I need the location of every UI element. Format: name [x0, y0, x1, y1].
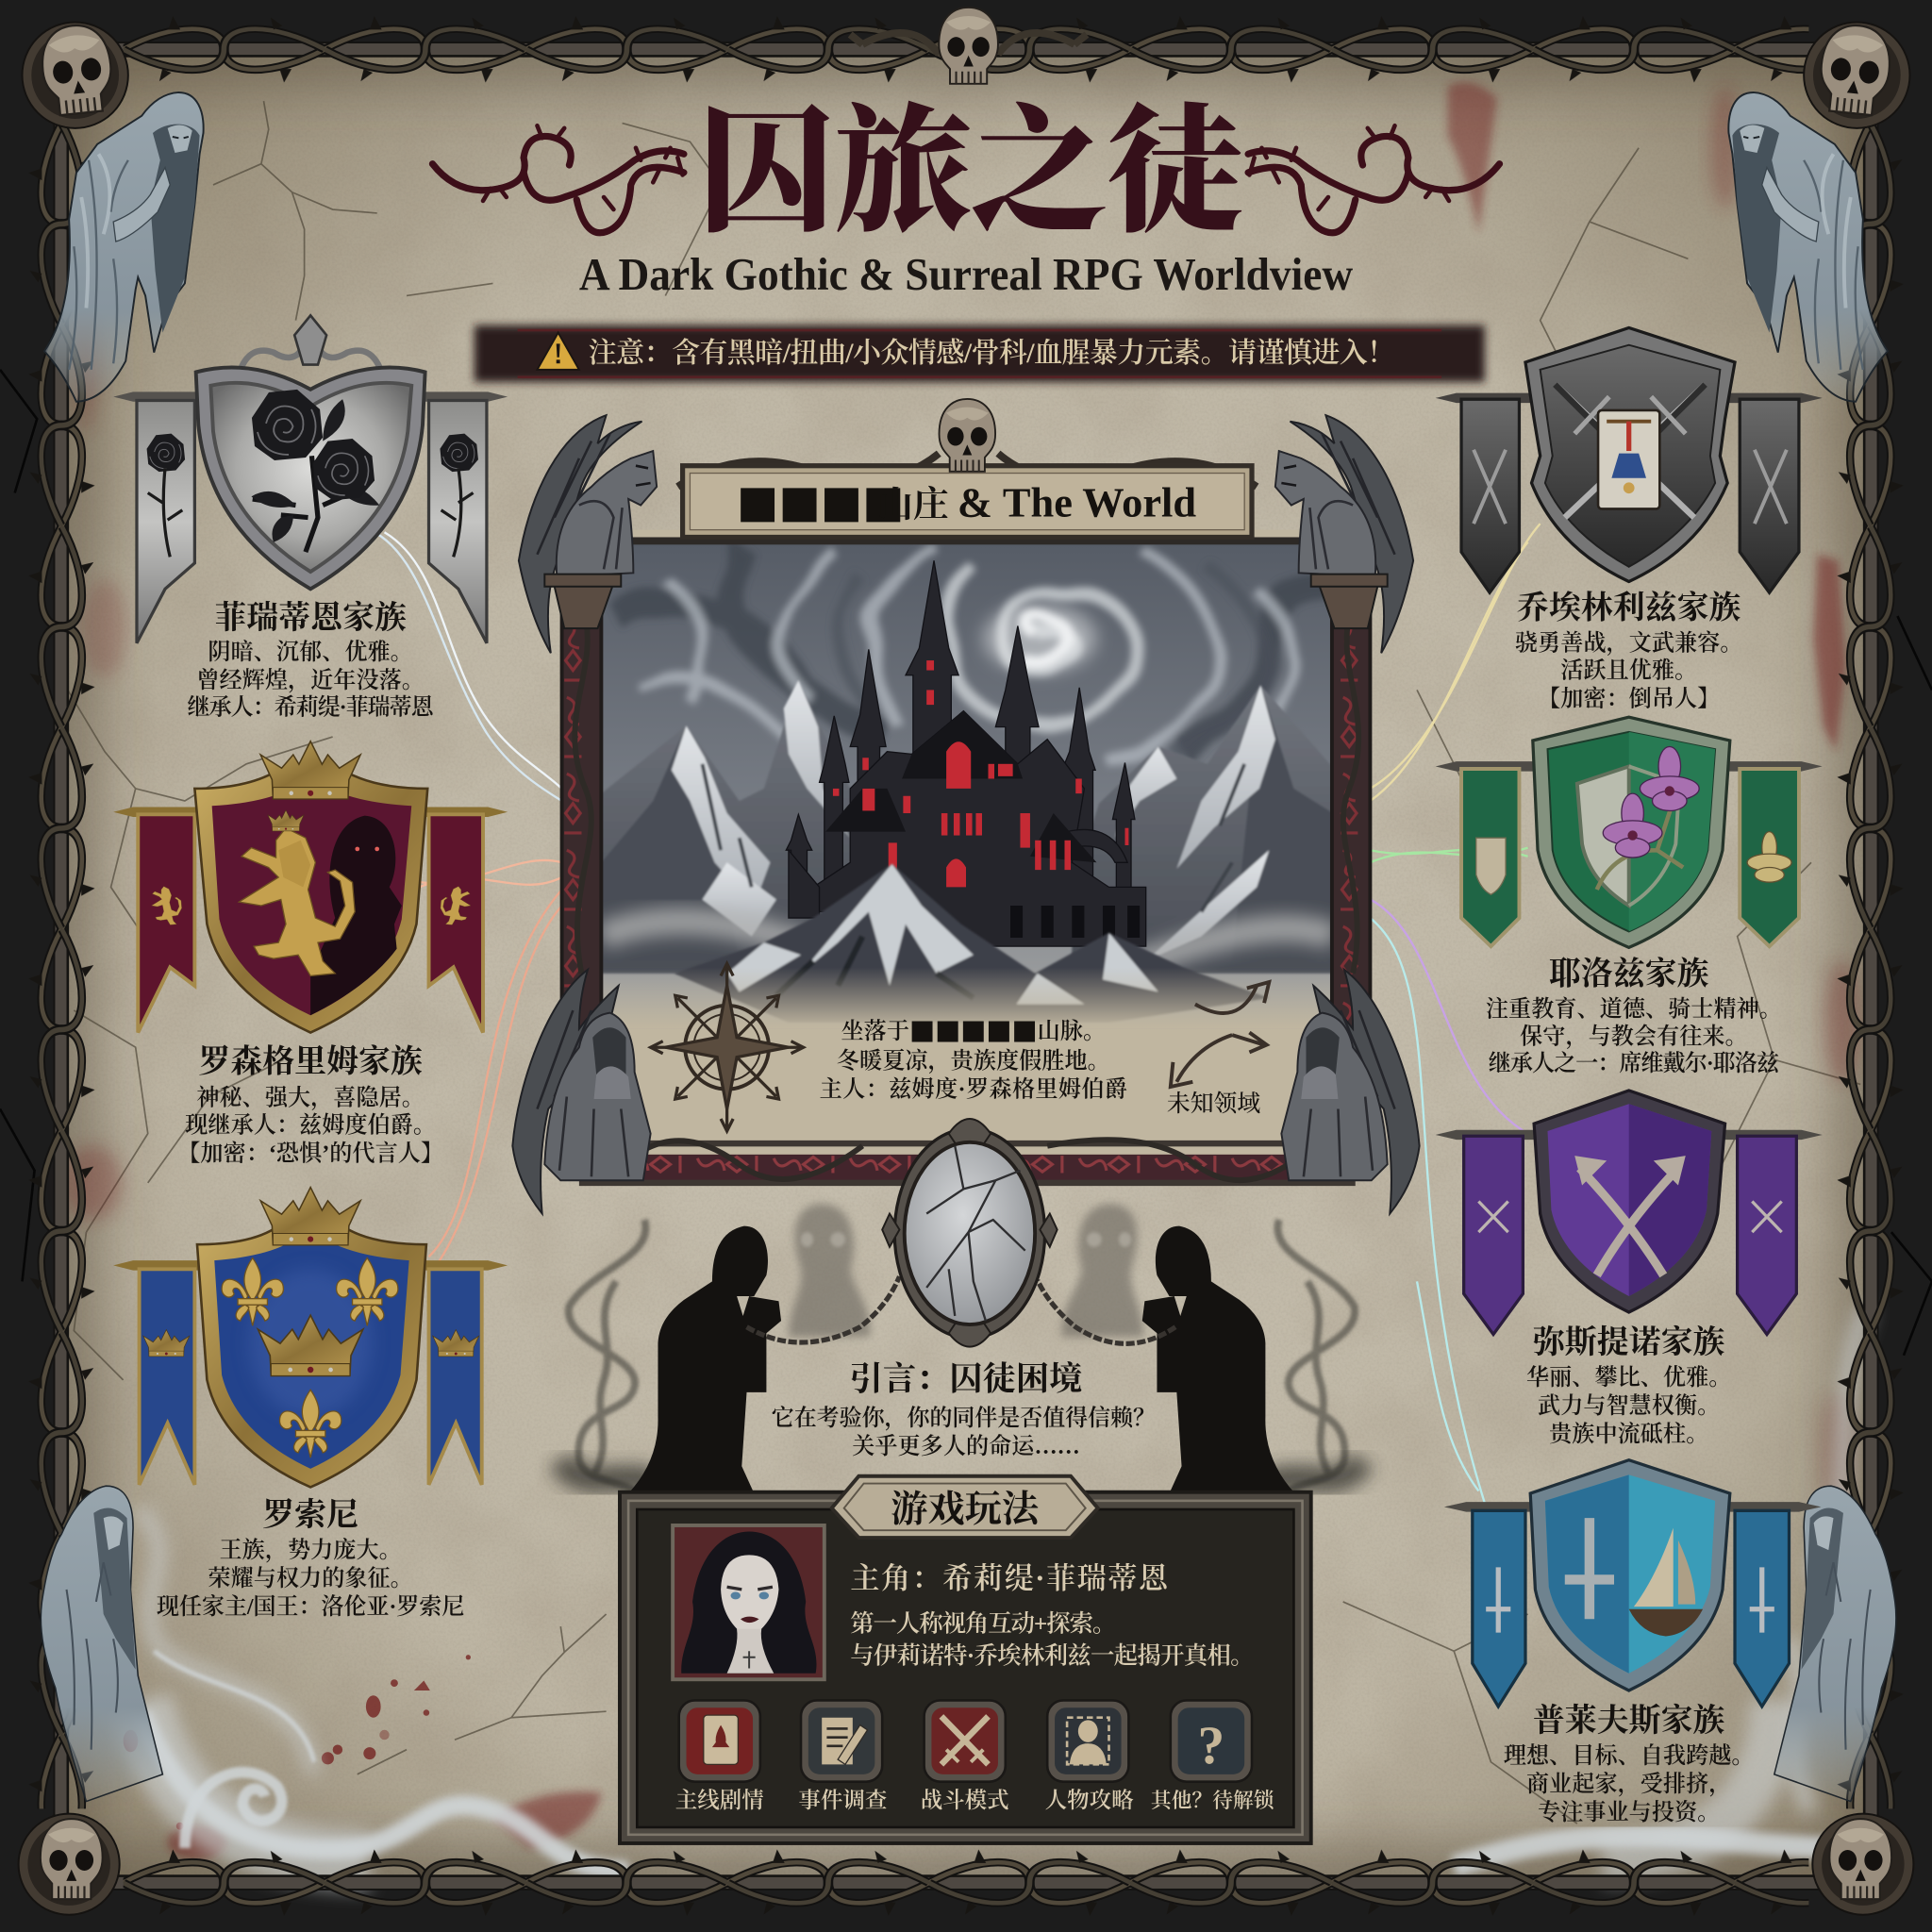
house text: Yeloz — [1486, 957, 1782, 1076]
warning banner: 注意：含有黑暗/扭曲/小众情感/骨科/血腥暴力元素。请谨慎进入！ — [589, 337, 1395, 369]
subtitle: A Dark Gothic & Surreal RPG Worldview — [579, 250, 1353, 300]
house text: Rossoni: 罗索尼 — [262, 1497, 358, 1533]
house text: Mistino: 弥斯提诺家族 — [1533, 1324, 1725, 1360]
icon button: main story: 主线剧情 — [675, 1788, 764, 1813]
ghost: top right — [1728, 92, 1888, 402]
label: unknown territory: 未知领域 — [1167, 1091, 1260, 1117]
gameplay description: 与伊莉诺特·乔埃林利兹一起揭开真相。 — [850, 1641, 1255, 1669]
house text: Ferretin — [188, 600, 436, 721]
gameplay description: 第一人称视角互动+探索。 — [850, 1609, 1116, 1637]
house text: Yeloz: 注重教育、道德、骑士精神。 — [1486, 997, 1782, 1023]
house text: Ferretin: 菲瑞蒂恩家族 — [214, 600, 407, 636]
icon button: investigation: 事件调查 — [798, 1788, 887, 1813]
gargoyle: top left — [519, 415, 657, 653]
icon button: unlock: ? — [1198, 1716, 1224, 1775]
ghost eyes — [801, 1232, 1131, 1247]
plaque frame pillars — [562, 537, 1370, 1183]
house text: Ferretin: 曾经辉煌，近年没落。 — [196, 668, 425, 693]
house text: Rosengrim: 【加密：‘恐惧’的代言人】 — [177, 1141, 443, 1166]
heading plaque: world: & The World — [958, 478, 1196, 525]
house text: Pleifus: 理想、目标、自我跨越。 — [1504, 1743, 1755, 1769]
prisoner silhouette: left — [628, 1226, 781, 1493]
gameplay description — [850, 1609, 1255, 1669]
icon button: characters: 人物攻略 — [1045, 1788, 1134, 1813]
icon button: main story — [675, 1700, 764, 1813]
connection wisps — [370, 524, 1541, 1503]
house text: Rossoni: 荣耀与权力的象征。 — [208, 1566, 413, 1591]
house text: Ferretin: 继承人：希莉缇·菲瑞蒂恩 — [188, 695, 436, 721]
icon: unknown-territory arrows — [1171, 982, 1269, 1087]
title ornament: thorns left — [432, 125, 684, 233]
quote heading: 引言：囚徒困境 — [850, 1360, 1082, 1397]
house text: Joelinliz: 骁勇善战，文武兼容。 — [1515, 631, 1742, 657]
icon: chains — [747, 1276, 1175, 1343]
icon button: unlock — [1151, 1700, 1274, 1812]
house text: Yeloz: 保守，与教会有往来。 — [1520, 1024, 1748, 1049]
house text: Joelinliz — [1515, 591, 1742, 711]
house crest: Pleifus — [1444, 1460, 1821, 1707]
icon: compass — [651, 963, 804, 1131]
ghost: bottom right — [1774, 1486, 1896, 1802]
house crest: Yeloz — [1436, 717, 1823, 947]
world description: 冬暖夏凉，贵族度假胜地。 — [837, 1048, 1110, 1074]
house text: Rosengrim: 罗森格里姆家族 — [198, 1043, 423, 1079]
heading plaque: world: 山庄 — [877, 485, 949, 525]
house crest: Rosengrim — [113, 741, 508, 1033]
portrait: heroine — [673, 1525, 824, 1679]
ghost: bottom left — [41, 1486, 162, 1802]
house text: Rosengrim: 神秘、强大，喜隐居。 — [196, 1086, 425, 1111]
quote text — [772, 1406, 1156, 1459]
house text: Mistino: 华丽、攀比、优雅。 — [1526, 1365, 1731, 1391]
painting: castle — [786, 560, 1146, 946]
heading plaque: gameplay — [832, 1476, 1098, 1538]
icon button: combat: 战斗模式 — [921, 1788, 1009, 1813]
icon button: characters — [1045, 1700, 1134, 1813]
heading plaque: gameplay: 游戏玩法 — [891, 1490, 1041, 1530]
icon: cracked mirror — [882, 1119, 1058, 1347]
icon: warning triangle — [537, 333, 579, 370]
mist: bottom left — [138, 1509, 628, 1871]
house text: Rossoni — [157, 1497, 464, 1620]
house text: Yeloz: 继承人之一：席维戴尔·耶洛兹 — [1489, 1051, 1780, 1076]
house text: Yeloz: 耶洛兹家族 — [1549, 957, 1709, 992]
house crest: Joelinliz — [1436, 327, 1823, 592]
house text: Mistino: 贵族中流砥柱。 — [1549, 1422, 1708, 1447]
house text: Joelinliz: 乔埃林利兹家族 — [1517, 591, 1741, 626]
icon button: unlock: 其他？待解锁 — [1151, 1789, 1274, 1812]
world description: 主人：兹姆度·罗森格里姆伯爵 — [820, 1076, 1127, 1102]
house text: Pleifus — [1504, 1703, 1755, 1825]
house crest: Mistino — [1436, 1091, 1823, 1335]
icon button: combat — [921, 1700, 1009, 1813]
warning banner — [475, 325, 1485, 382]
painting: rock under castle — [674, 864, 1269, 1023]
protagonist name: 主角：希莉缇·菲瑞蒂恩 — [850, 1562, 1170, 1595]
title ornament: thorns right — [1248, 125, 1500, 233]
mist: bottom right — [1454, 1306, 1868, 1867]
world description — [820, 1013, 1127, 1102]
smoke around prisoners — [560, 1220, 1363, 1497]
weeping angel: bottom left — [512, 970, 651, 1214]
world description: 坐落于■■■■■山脉。 — [841, 1013, 1106, 1045]
quote text: 它在考验你，你的同伴是否值得信赖？ — [772, 1406, 1156, 1431]
house text: Ferretin: 阴暗、沉郁、优雅。 — [208, 640, 413, 665]
house text: Mistino: 武力与智慧权衡。 — [1538, 1393, 1720, 1419]
house text: Rossoni: 王族，势力庞大。 — [220, 1538, 402, 1563]
house text: Joelinliz: 活跃且优雅。 — [1560, 658, 1697, 683]
house text: Joelinliz: 【加密：倒吊人】 — [1538, 686, 1720, 711]
title: 囚旅之徒 — [697, 96, 1244, 249]
heading plaque: world: ■■■■ — [737, 475, 905, 527]
quote text: 关乎更多人的命运…… — [852, 1434, 1080, 1459]
house text: Rosengrim — [177, 1043, 443, 1166]
house crest: Rossoni — [113, 1188, 508, 1487]
house text: Mistino — [1526, 1324, 1731, 1447]
painting: sky — [601, 542, 1333, 1035]
house text: Pleifus: 专注事业与投资。 — [1538, 1800, 1720, 1825]
panel: world map frame — [562, 530, 1370, 1183]
weeping angel: bottom right — [1281, 970, 1420, 1214]
house crest: Ferretin — [113, 315, 508, 643]
house text: Rosengrim: 现继承人：兹姆度伯爵。 — [185, 1112, 436, 1138]
painting: mountains — [601, 680, 1333, 974]
ghost silhouette: right — [1062, 1204, 1143, 1337]
icon button: investigation — [798, 1700, 887, 1813]
house text: Rossoni: 现任家主/国王：洛伦亚·罗索尼 — [157, 1594, 464, 1620]
ghost: top left — [44, 92, 204, 402]
house text: Pleifus: 商业起家，受排挤， — [1526, 1772, 1731, 1797]
painting: fade to parchment — [591, 967, 1343, 1029]
panel: gameplay — [620, 1476, 1311, 1843]
house text: Pleifus: 普莱夫斯家族 — [1533, 1703, 1725, 1739]
prisoner silhouette: right — [1142, 1226, 1295, 1493]
ghost silhouette: left — [789, 1204, 870, 1337]
gargoyle: top right — [1275, 415, 1413, 653]
heading plaque: world — [677, 399, 1257, 537]
